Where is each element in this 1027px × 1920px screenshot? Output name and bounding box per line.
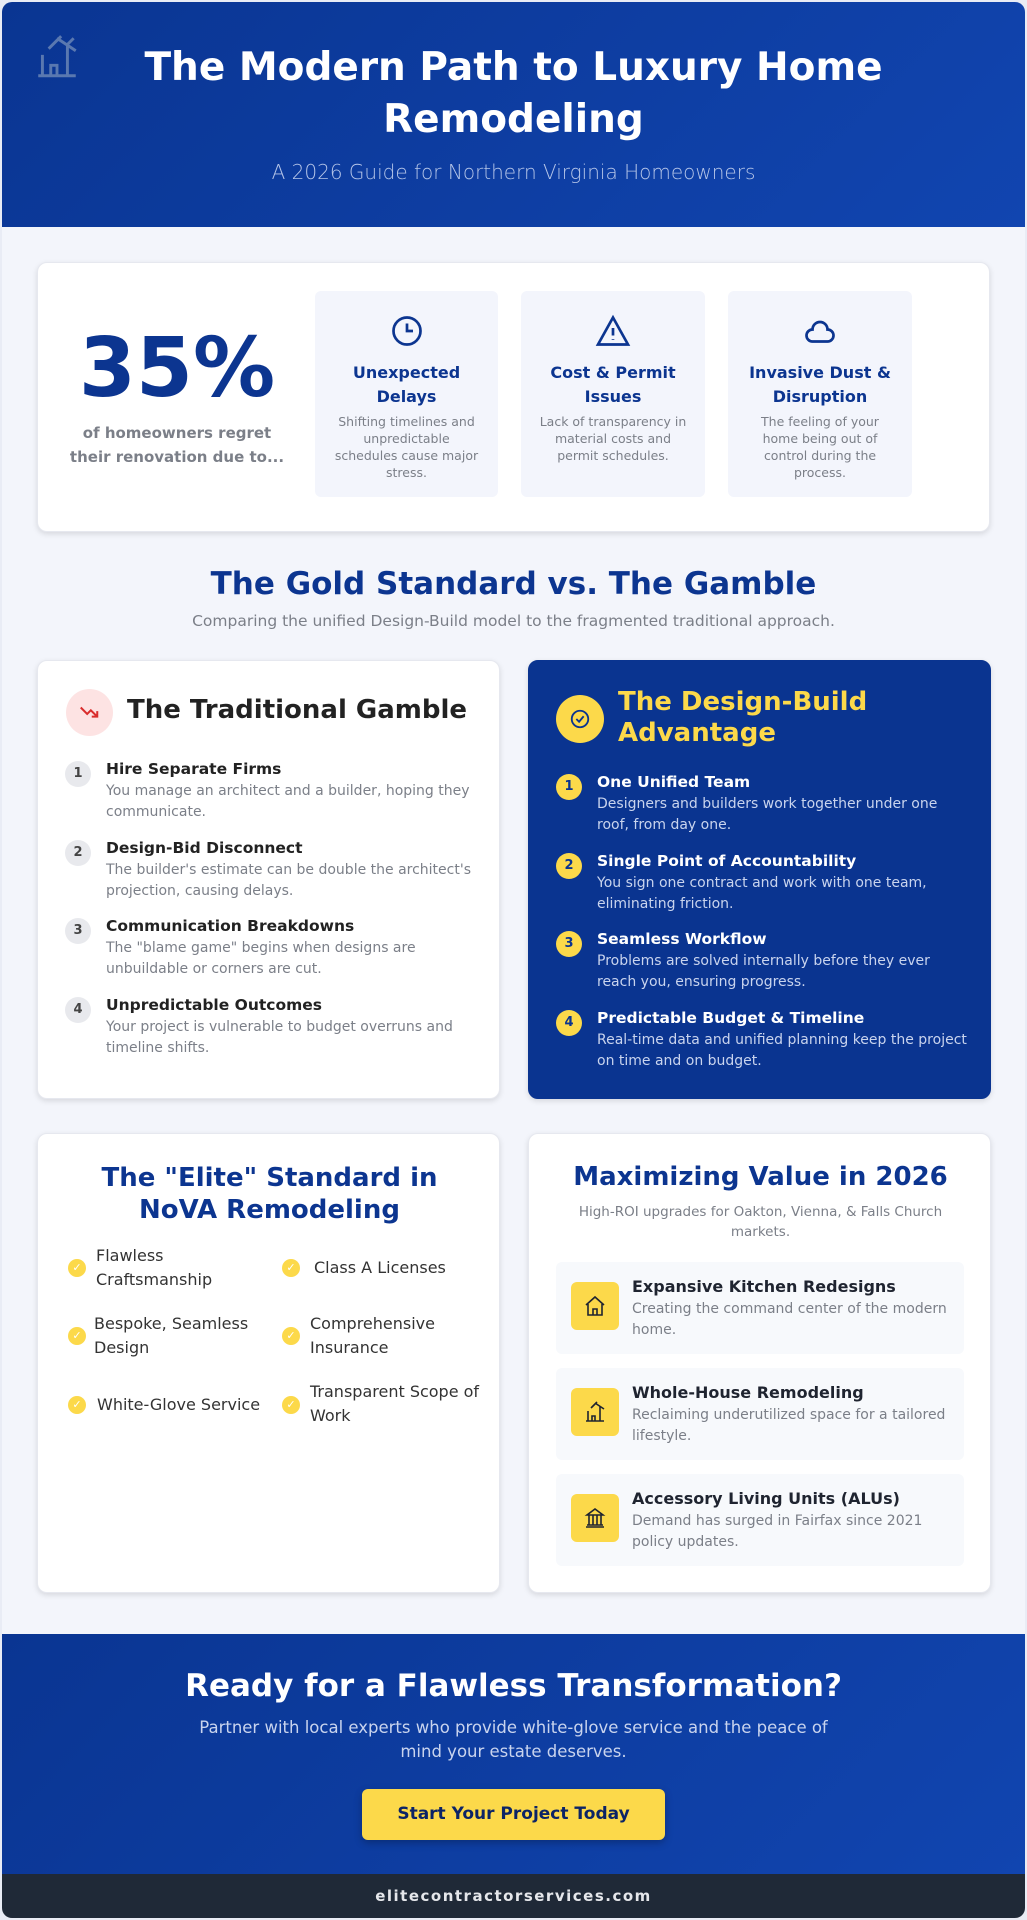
item: kitchen <box>556 1262 964 1354</box>
panel: elite standard: White-Glove Service <box>97 1395 260 1414</box>
panel: elite standard: ✓ <box>286 1398 296 1411</box>
section heading <box>192 566 835 630</box>
panel: traditional gamble: 2 <box>73 845 83 860</box>
panel: design-build <box>528 660 991 1099</box>
icon: check circle <box>556 695 604 743</box>
panel: design-build: Real-time data and unified planning keep the project on time and on budget. <box>597 1032 967 1069</box>
panel: design-build: Designers and builders work together under one roof, from day one. <box>597 796 937 833</box>
footer <box>2 1874 1025 1918</box>
CTA section: mind your estate deserves. <box>400 1742 627 1761</box>
panel: design-build: 2 <box>564 858 574 873</box>
panel: design-build: Single Point of Accountability <box>597 852 856 870</box>
footer: elitecontractorservices.com <box>375 1887 652 1905</box>
panel: maximizing value <box>528 1133 991 1593</box>
stat 35%: of homeowners regret <box>83 424 271 442</box>
card: delays: Unexpected <box>353 363 460 382</box>
panel: design-build: You sign one contract and work with one team, eliminating friction. <box>597 875 927 912</box>
panel: design-build: Predictable Budget & Timeline <box>597 1009 864 1027</box>
CTA section: Partner with local experts who provide white-glove service and the peace of <box>199 1718 828 1737</box>
item: whole house: Reclaiming underutilized space for a tailored lifestyle. <box>632 1407 945 1444</box>
panel: traditional gamble: Your project is vulnerable to budget overruns and timeline shifts. <box>106 1019 453 1056</box>
panel: elite standard: ✓ <box>286 1329 296 1342</box>
panel: design-build: Seamless Workflow <box>597 930 767 948</box>
item: ALU: Demand has surged in Fairfax since 2021 policy updates. <box>632 1513 922 1550</box>
panel: traditional gamble: Unpredictable Outcomes <box>106 996 322 1014</box>
panel: elite standard: Design <box>94 1338 149 1357</box>
panel: design-build: One Unified Team <box>597 773 750 791</box>
panel: traditional gamble <box>37 660 500 1099</box>
title <box>144 45 883 142</box>
panel: traditional gamble: The builder's estimate can be double the architect's projection, causing delays. <box>106 862 471 899</box>
item: whole house: Whole-House Remodeling <box>632 1383 864 1402</box>
panel: traditional gamble: You manage an architect and a builder, hoping they communicate. <box>106 783 470 820</box>
panel: maximizing value: High-ROI upgrades for Oakton, Vienna, & Falls Church markets. <box>579 1204 942 1240</box>
panel: elite standard: ✓ <box>72 1398 82 1411</box>
card: delays: Shifting timelines and unpredictable schedules cause major stress. <box>335 414 478 480</box>
panel: traditional gamble: Design-Bid Disconnect <box>106 839 303 857</box>
button <box>362 1789 665 1840</box>
subtitle: A 2026 Guide for Northern Virginia Homeowners <box>272 160 755 184</box>
panel: elite standard: ✓ <box>72 1329 82 1342</box>
title: The Modern Path to Luxury Home <box>144 45 883 90</box>
CTA section: Ready for a Flawless Transformation? <box>185 1668 842 1704</box>
item: kitchen: Expansive Kitchen Redesigns <box>632 1277 896 1296</box>
panel: elite standard: Bespoke, Seamless <box>94 1314 248 1333</box>
panel: elite standard: Craftsmanship <box>96 1270 212 1289</box>
panel: elite standard: Comprehensive <box>310 1314 435 1333</box>
panel: design-build: 1 <box>564 779 574 794</box>
panel: design-build: 3 <box>564 936 574 951</box>
panel: elite standard: ✓ <box>72 1261 82 1274</box>
item: whole house <box>556 1368 964 1460</box>
panel: traditional gamble: 4 <box>73 1002 83 1017</box>
section heading: The Gold Standard vs. The Gamble <box>211 566 816 602</box>
card: dust: The feeling of your home being out of control during the process. <box>761 414 879 480</box>
item: ALU <box>556 1474 964 1566</box>
stat 35%: 35% <box>79 321 275 416</box>
card: cost: Cost & Permit <box>550 363 676 382</box>
panel: traditional gamble: The "blame game" begins when designs are unbuildable or corners are cut. <box>106 940 416 977</box>
item: ALU: Accessory Living Units (ALUs) <box>632 1489 900 1508</box>
stat 35% <box>70 321 284 466</box>
card: cost: Issues <box>585 387 641 406</box>
heading: Maximizing Value in 2026 <box>573 1162 948 1192</box>
CTA section <box>2 1634 1025 1874</box>
panel: design-build: 4 <box>564 1015 574 1030</box>
panel: stats <box>37 262 990 532</box>
panel: elite standard: ✓ <box>286 1261 296 1274</box>
panel: elite standard: Insurance <box>310 1338 388 1357</box>
icon: header building <box>38 35 76 78</box>
heading: NoVA Remodeling <box>139 1195 400 1225</box>
panel: elite standard: Flawless <box>96 1246 164 1265</box>
panel: design-build: Problems are solved internally before they ever reach you, ensuring progress. <box>597 953 930 990</box>
section heading: Comparing the unified Design-Build model to the fragmented traditional approach. <box>192 612 835 630</box>
card: delays <box>315 291 498 497</box>
card: dust: Invasive Dust & <box>749 363 891 382</box>
icon: trend <box>66 689 113 736</box>
panel: elite standard: Work <box>310 1406 351 1425</box>
panel: traditional gamble: Communication Breakdowns <box>106 917 354 935</box>
heading: The Design-Build <box>618 687 867 717</box>
stat 35%: their renovation due to... <box>70 448 284 466</box>
item: kitchen: Creating the command center of the modern home. <box>632 1301 947 1338</box>
card: dust <box>728 291 912 497</box>
panel: elite standard <box>37 1133 500 1593</box>
panel: traditional gamble: Hire Separate Firms <box>106 760 281 778</box>
button: Start Your Project Today <box>397 1804 630 1824</box>
panel: traditional gamble: 3 <box>73 923 83 938</box>
heading: The "Elite" Standard in <box>102 1163 438 1193</box>
card: cost <box>521 291 705 497</box>
header <box>2 2 1025 227</box>
heading <box>618 687 867 748</box>
card: cost: Lack of transparency in material costs and permit schedules. <box>540 414 686 463</box>
panel: elite standard: Transparent Scope of <box>310 1382 479 1401</box>
panel: traditional gamble: 1 <box>73 766 83 781</box>
heading: The Traditional Gamble <box>127 695 467 725</box>
heading <box>102 1163 438 1225</box>
card: delays: Delays <box>377 387 436 406</box>
title: Remodeling <box>383 97 644 142</box>
heading: Advantage <box>618 718 776 748</box>
panel: elite standard: Class A Licenses <box>314 1258 446 1277</box>
card: dust: Disruption <box>773 387 867 406</box>
